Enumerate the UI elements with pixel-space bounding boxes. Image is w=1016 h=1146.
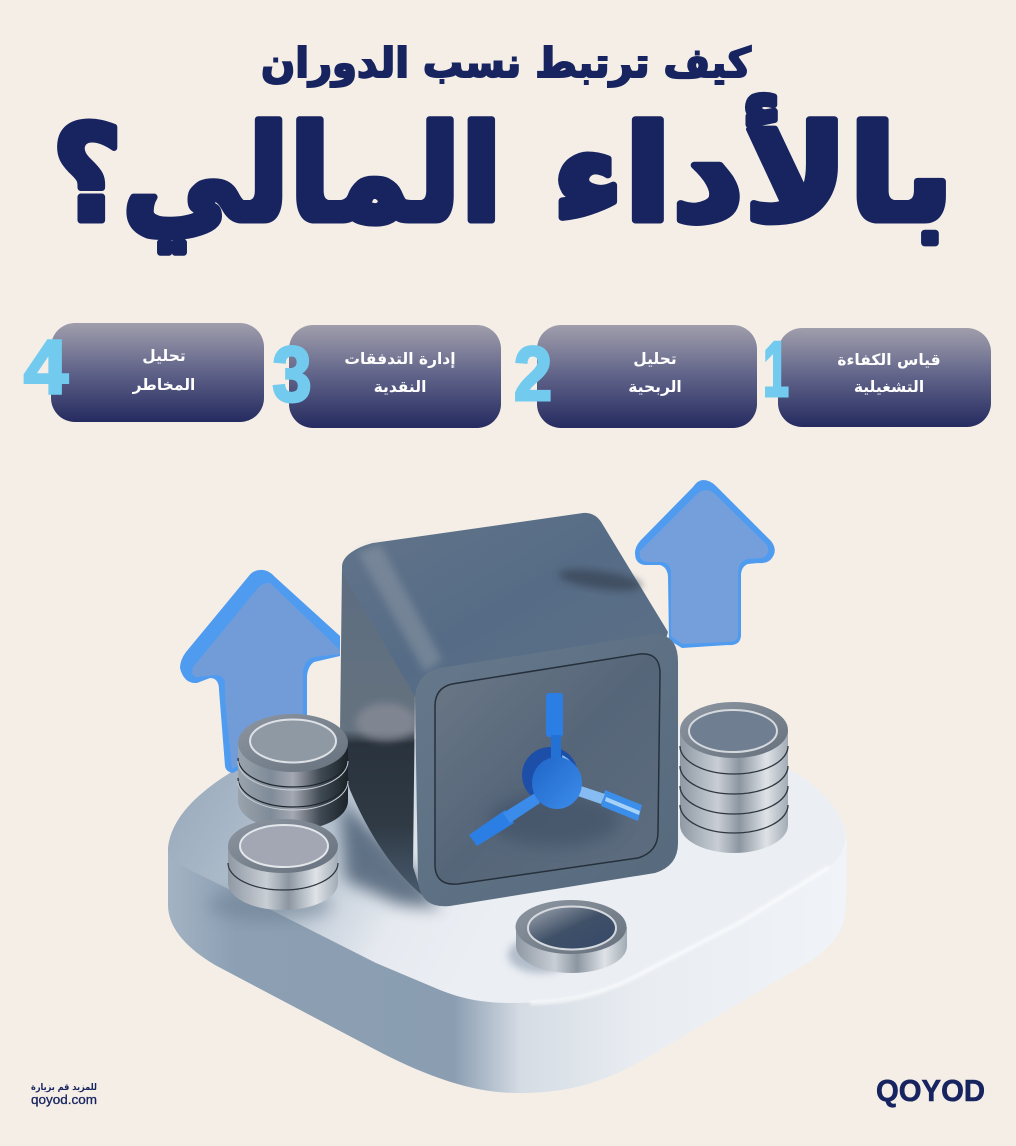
step card 3 [272, 325, 501, 428]
safe top face [342, 513, 668, 700]
coin stack: front left [228, 819, 338, 910]
coin: front [516, 900, 627, 973]
title: second line [52, 95, 954, 252]
step card 3: إدارة التدفقات [344, 350, 456, 368]
step card 3: النقدية [374, 378, 426, 396]
title: second line: بالأداء [552, 95, 954, 252]
handle [469, 693, 642, 846]
safe top highlight [358, 544, 442, 672]
step card 1 [763, 325, 991, 427]
icon: left arrow [180, 570, 340, 773]
logo: QOYOD: QOYOD [876, 1073, 985, 1108]
coin stack: right [680, 702, 788, 853]
step card 2: 2 [514, 332, 552, 417]
safe side face [340, 543, 430, 895]
step card 4 [24, 323, 264, 422]
footer: visit text: للمزيد قم بزيارة [31, 1082, 97, 1093]
illustration: platform base [168, 725, 847, 1093]
door shadow [490, 794, 620, 846]
step card 1: التشغيلية [854, 378, 924, 396]
title: second line: المالي؟ [52, 98, 502, 252]
icon: right arrow [635, 480, 775, 648]
step card 1: قياس الكفاءة [837, 351, 941, 369]
step card 2: تحليل [633, 350, 677, 368]
step card 2 [514, 325, 757, 428]
safe front frame [415, 635, 678, 906]
step card 4: تحليل [142, 347, 186, 365]
step card 3: 3 [272, 330, 312, 418]
footer: visit text: qoyod.com [31, 1092, 97, 1107]
step card 4: المخاطر [132, 376, 195, 394]
safe top shadow [557, 565, 643, 595]
step card 2: الربحية [628, 378, 682, 396]
safe door [435, 654, 660, 884]
shadows on platform [208, 800, 572, 973]
step card 4: 4 [24, 325, 68, 410]
coin stack: back left [238, 714, 348, 830]
title: first line: كيف ترتبط نسب الدوران [261, 39, 751, 88]
illustration: safe box [340, 513, 678, 906]
step card 1: 1 [763, 325, 789, 413]
footer: visit text [31, 1082, 97, 1107]
safe side coin reflection [356, 703, 416, 741]
